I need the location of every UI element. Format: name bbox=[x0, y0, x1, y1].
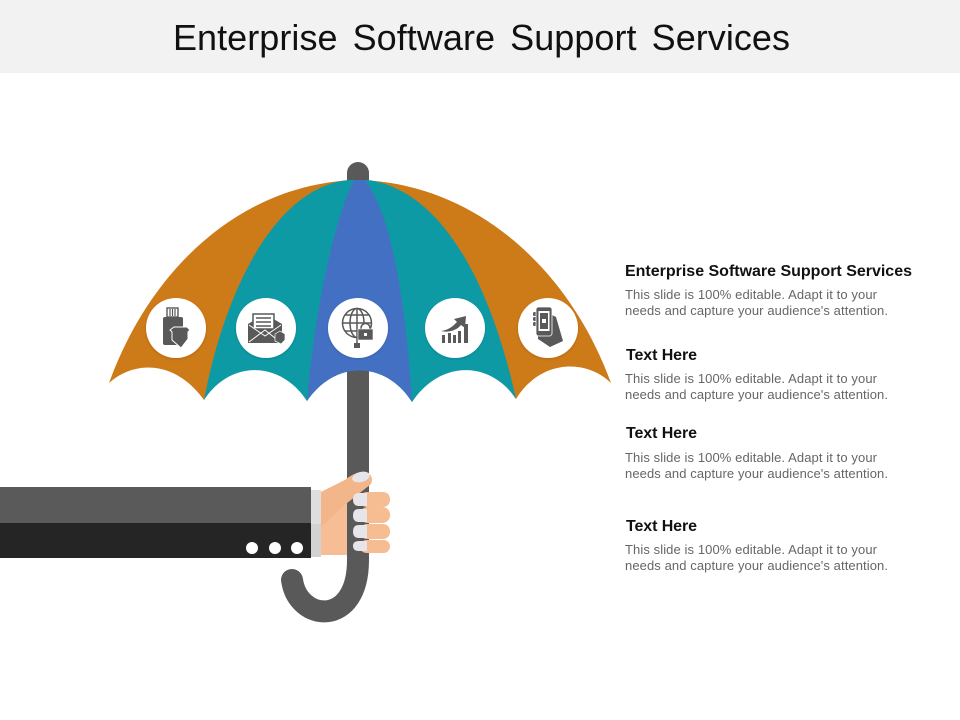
thumbnail bbox=[351, 470, 371, 484]
text block 3: Text Here bbox=[626, 425, 697, 442]
text block 4: This slide is 100% editable. Adapt it to your bbox=[625, 542, 878, 557]
title band bbox=[0, 0, 960, 73]
icon: growth chart with arrow bbox=[425, 298, 485, 358]
sleeve bbox=[0, 487, 311, 523]
text block 1: Enterprise Software Support Services bbox=[625, 263, 912, 280]
canopy orange panels bbox=[109, 180, 611, 402]
icon: usb drive with shield bbox=[146, 298, 206, 358]
arm and hand bbox=[0, 470, 390, 558]
text block 3: This slide is 100% editable. Adapt it to your bbox=[625, 450, 878, 465]
fingers bbox=[360, 492, 390, 507]
sleeve buttons bbox=[246, 542, 303, 554]
text block 2 bbox=[625, 347, 888, 402]
text block 4 bbox=[625, 518, 888, 573]
text block 4: Text Here bbox=[626, 518, 697, 535]
palm and thumb bbox=[321, 472, 372, 555]
text block 2: Text Here bbox=[626, 347, 697, 364]
text block 2: This slide is 100% editable. Adapt it to your bbox=[625, 371, 878, 386]
text block 4: needs and capture your audience's attention. bbox=[625, 558, 888, 573]
icon: hand holding phone bbox=[518, 298, 578, 358]
canopy blue centre panel bbox=[307, 180, 412, 402]
fingernails bbox=[353, 493, 367, 506]
text block 3 bbox=[625, 425, 888, 481]
thumb shadow bbox=[321, 472, 372, 527]
umbrella shaft and hook bbox=[292, 173, 358, 611]
text block 1: needs and capture your audience's attention. bbox=[625, 303, 888, 318]
title: Enterprise Software Support Services bbox=[173, 17, 790, 58]
canopy teal panels bbox=[204, 180, 516, 402]
text block 1: This slide is 100% editable. Adapt it to your bbox=[625, 287, 878, 302]
icon: globe with padlock bbox=[328, 298, 388, 358]
text block 1 bbox=[625, 263, 912, 318]
icon: open envelope with letter bbox=[236, 298, 296, 358]
shirt cuff bbox=[311, 490, 321, 524]
umbrella canopy bbox=[109, 180, 611, 402]
text block 3: needs and capture your audience's attention. bbox=[625, 466, 888, 481]
text block 2: needs and capture your audience's attention. bbox=[625, 387, 888, 402]
